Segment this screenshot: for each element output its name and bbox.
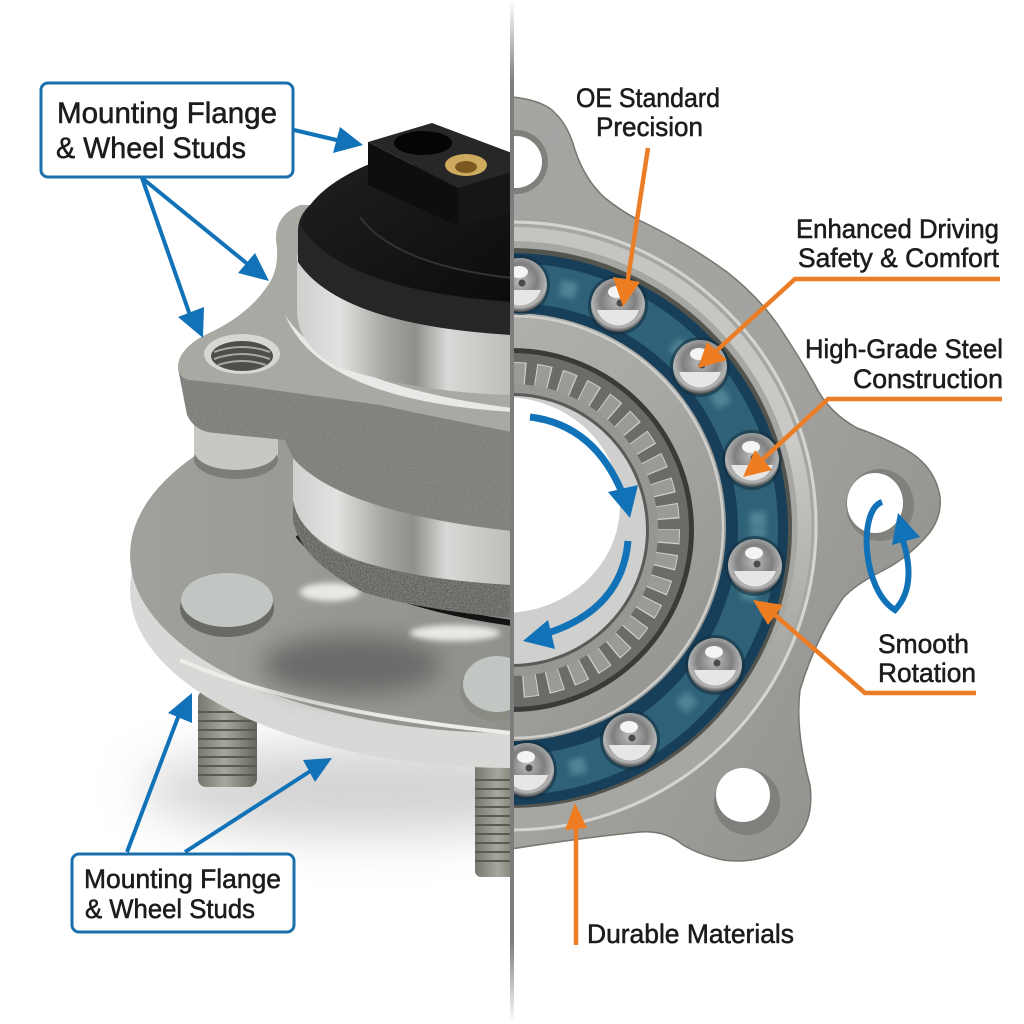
mounting hole: bottom [714,768,780,835]
callout box: bottom mounting flange [72,854,294,932]
callout box: top mounting flange: & Wheel Studs [56,132,246,165]
blue leader arrows [127,127,363,852]
ground shadow [140,745,600,835]
threaded bolt hole [204,334,280,374]
callout box: bottom mounting flange: & Wheel Studs [85,894,255,924]
label: High-Grade Steel Construction: High-Grade Steel [805,334,1003,364]
rotation arrow: upper [530,417,638,518]
stud: lower centre [475,767,510,877]
label: Durable Materials: Durable Materials [587,919,794,949]
cast mounting flange [178,205,512,531]
label: Enhanced Driving Safety & Comfort: Enhanced Driving [796,214,999,244]
blue grease cavity [514,253,788,805]
left half: exterior view of the hub [130,123,510,877]
rotation arrow: lower [523,541,628,649]
orange leader arrows [565,148,1002,945]
dark seal ring [293,500,512,618]
steel balls [490,255,785,800]
label: Smooth Rotation: Smooth [878,629,969,659]
stud: lower left [198,690,257,787]
hub seal shadow line [298,535,512,623]
label: OE Standard Precision: Precision [596,112,703,142]
right half: cutaway view of the bearing [514,96,941,862]
stud head: right [460,656,510,721]
bore [514,398,620,612]
rotation arrow: lug loop [867,502,920,610]
stud head: front [180,573,274,637]
label: OE Standard Precision: OE Standard [576,83,720,113]
label: Smooth Rotation: Rotation [878,658,976,688]
outer race [514,220,818,832]
stud head: back [194,425,278,479]
wheel flange disc [130,439,510,768]
inner race [514,313,726,741]
callout box: top mounting flange [41,83,293,177]
connector block [368,123,510,216]
mounting hole: top [514,130,548,194]
lower hub cylinder [293,458,510,585]
black sensor cap [298,165,512,335]
centre divider [510,0,514,1024]
callout box: top mounting flange: Mounting Flange [57,97,277,130]
mounting hole: right [846,469,914,541]
callout box: bottom mounting flange: Mounting Flange [84,864,281,894]
label: Enhanced Driving Safety & Comfort: Safety & Comfort [798,243,999,273]
ABS tone ring [514,353,689,707]
label: High-Grade Steel Construction: Construction [853,364,1003,394]
upper hub cylinder [285,255,512,412]
outer flange with lobes [505,96,940,861]
